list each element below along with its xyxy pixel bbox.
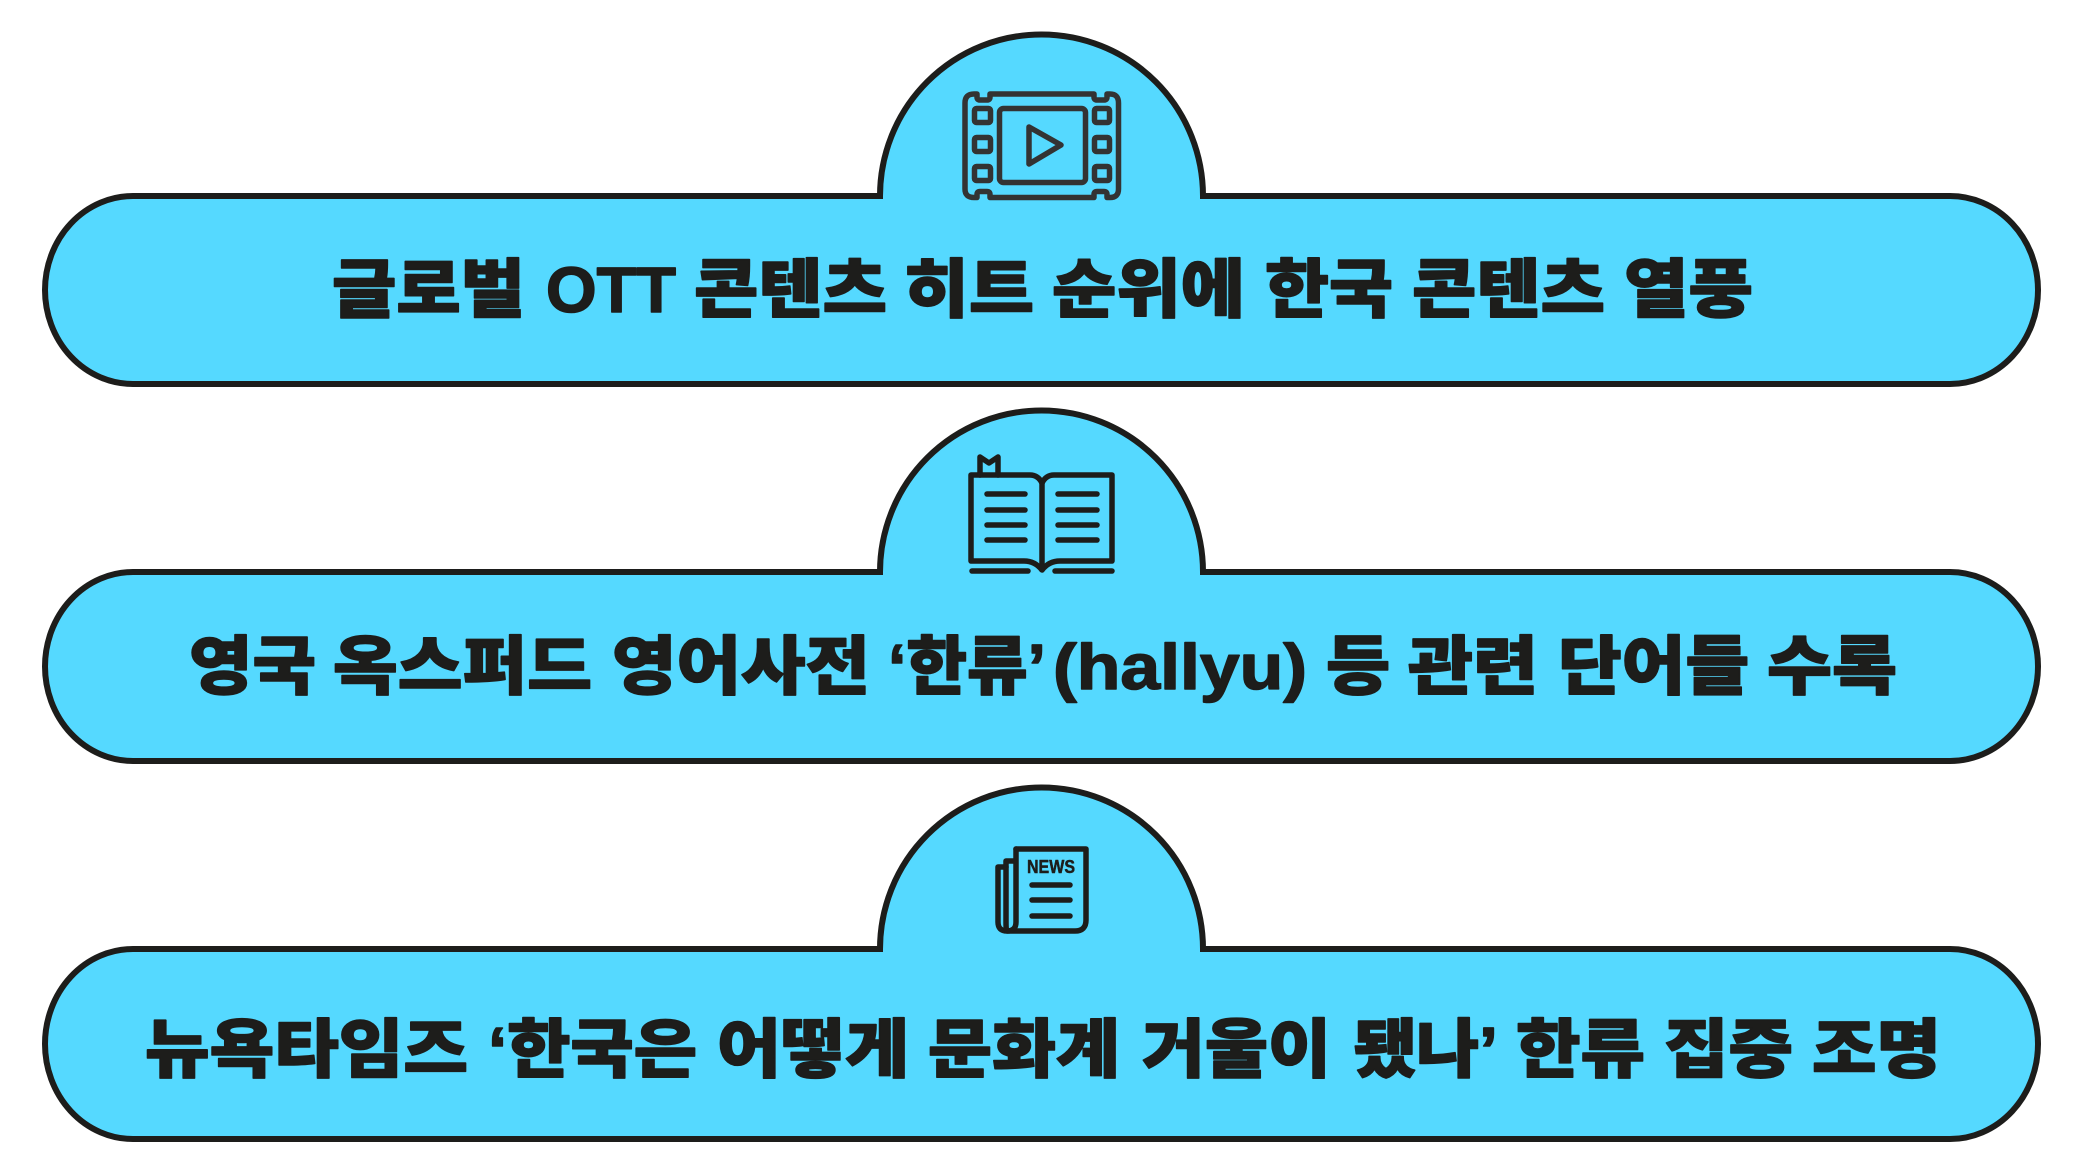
heading 3: 뉴욕타임즈	[145, 1014, 468, 1086]
heading 2: 옥스퍼드	[333, 631, 592, 703]
heading 3: 집중	[1664, 1014, 1793, 1086]
heading 3: 어떻게	[717, 1014, 909, 1086]
icon: open book with bookmark	[971, 457, 1112, 571]
heading 3: 문화계	[928, 1014, 1120, 1086]
heading 1: 히트	[904, 254, 1034, 326]
heading 1: 콘텐츠	[694, 254, 887, 326]
heading 3: 거울이	[1142, 1014, 1331, 1086]
heading 2	[189, 631, 1897, 703]
heading 1: 열풍	[1624, 254, 1753, 326]
heading 2: 영어사전	[612, 631, 870, 703]
icon: newspaper	[998, 849, 1086, 931]
heading 2: 단어들	[1558, 631, 1749, 703]
heading 1: OTT	[546, 254, 676, 326]
heading 3: 조명	[1812, 1014, 1941, 1086]
panel: Oxford dictionary	[45, 410, 2038, 761]
panel 2 shape	[45, 410, 2038, 761]
panel 3 shape	[45, 787, 2038, 1139]
heading 3: ‘한국은	[488, 1014, 697, 1086]
icon: film strip with play button	[965, 94, 1118, 198]
heading 2: (hallyu)	[1053, 631, 1307, 703]
panel: global OTT rankings	[45, 34, 2038, 384]
icon label: NEWS: NEWS	[1027, 857, 1075, 877]
heading 3	[145, 1014, 1941, 1086]
heading 1: 콘텐츠	[1412, 254, 1605, 326]
heading 1: 순위에	[1052, 254, 1245, 326]
heading 2: 등	[1326, 631, 1390, 703]
heading 2: ‘한류’	[888, 631, 1046, 703]
panel: New York Times	[45, 787, 2038, 1139]
heading 1: 한국	[1265, 254, 1393, 326]
panel 1 shape	[45, 34, 2038, 384]
heading 2: 영국	[189, 631, 316, 703]
heading 2: 수록	[1767, 631, 1897, 703]
heading 2: 관련	[1408, 631, 1538, 703]
heading 1: 글로벌	[332, 254, 525, 326]
heading 3: 됐나’	[1353, 1014, 1498, 1086]
heading 1	[332, 254, 1753, 326]
heading 3: 한류	[1516, 1014, 1645, 1086]
